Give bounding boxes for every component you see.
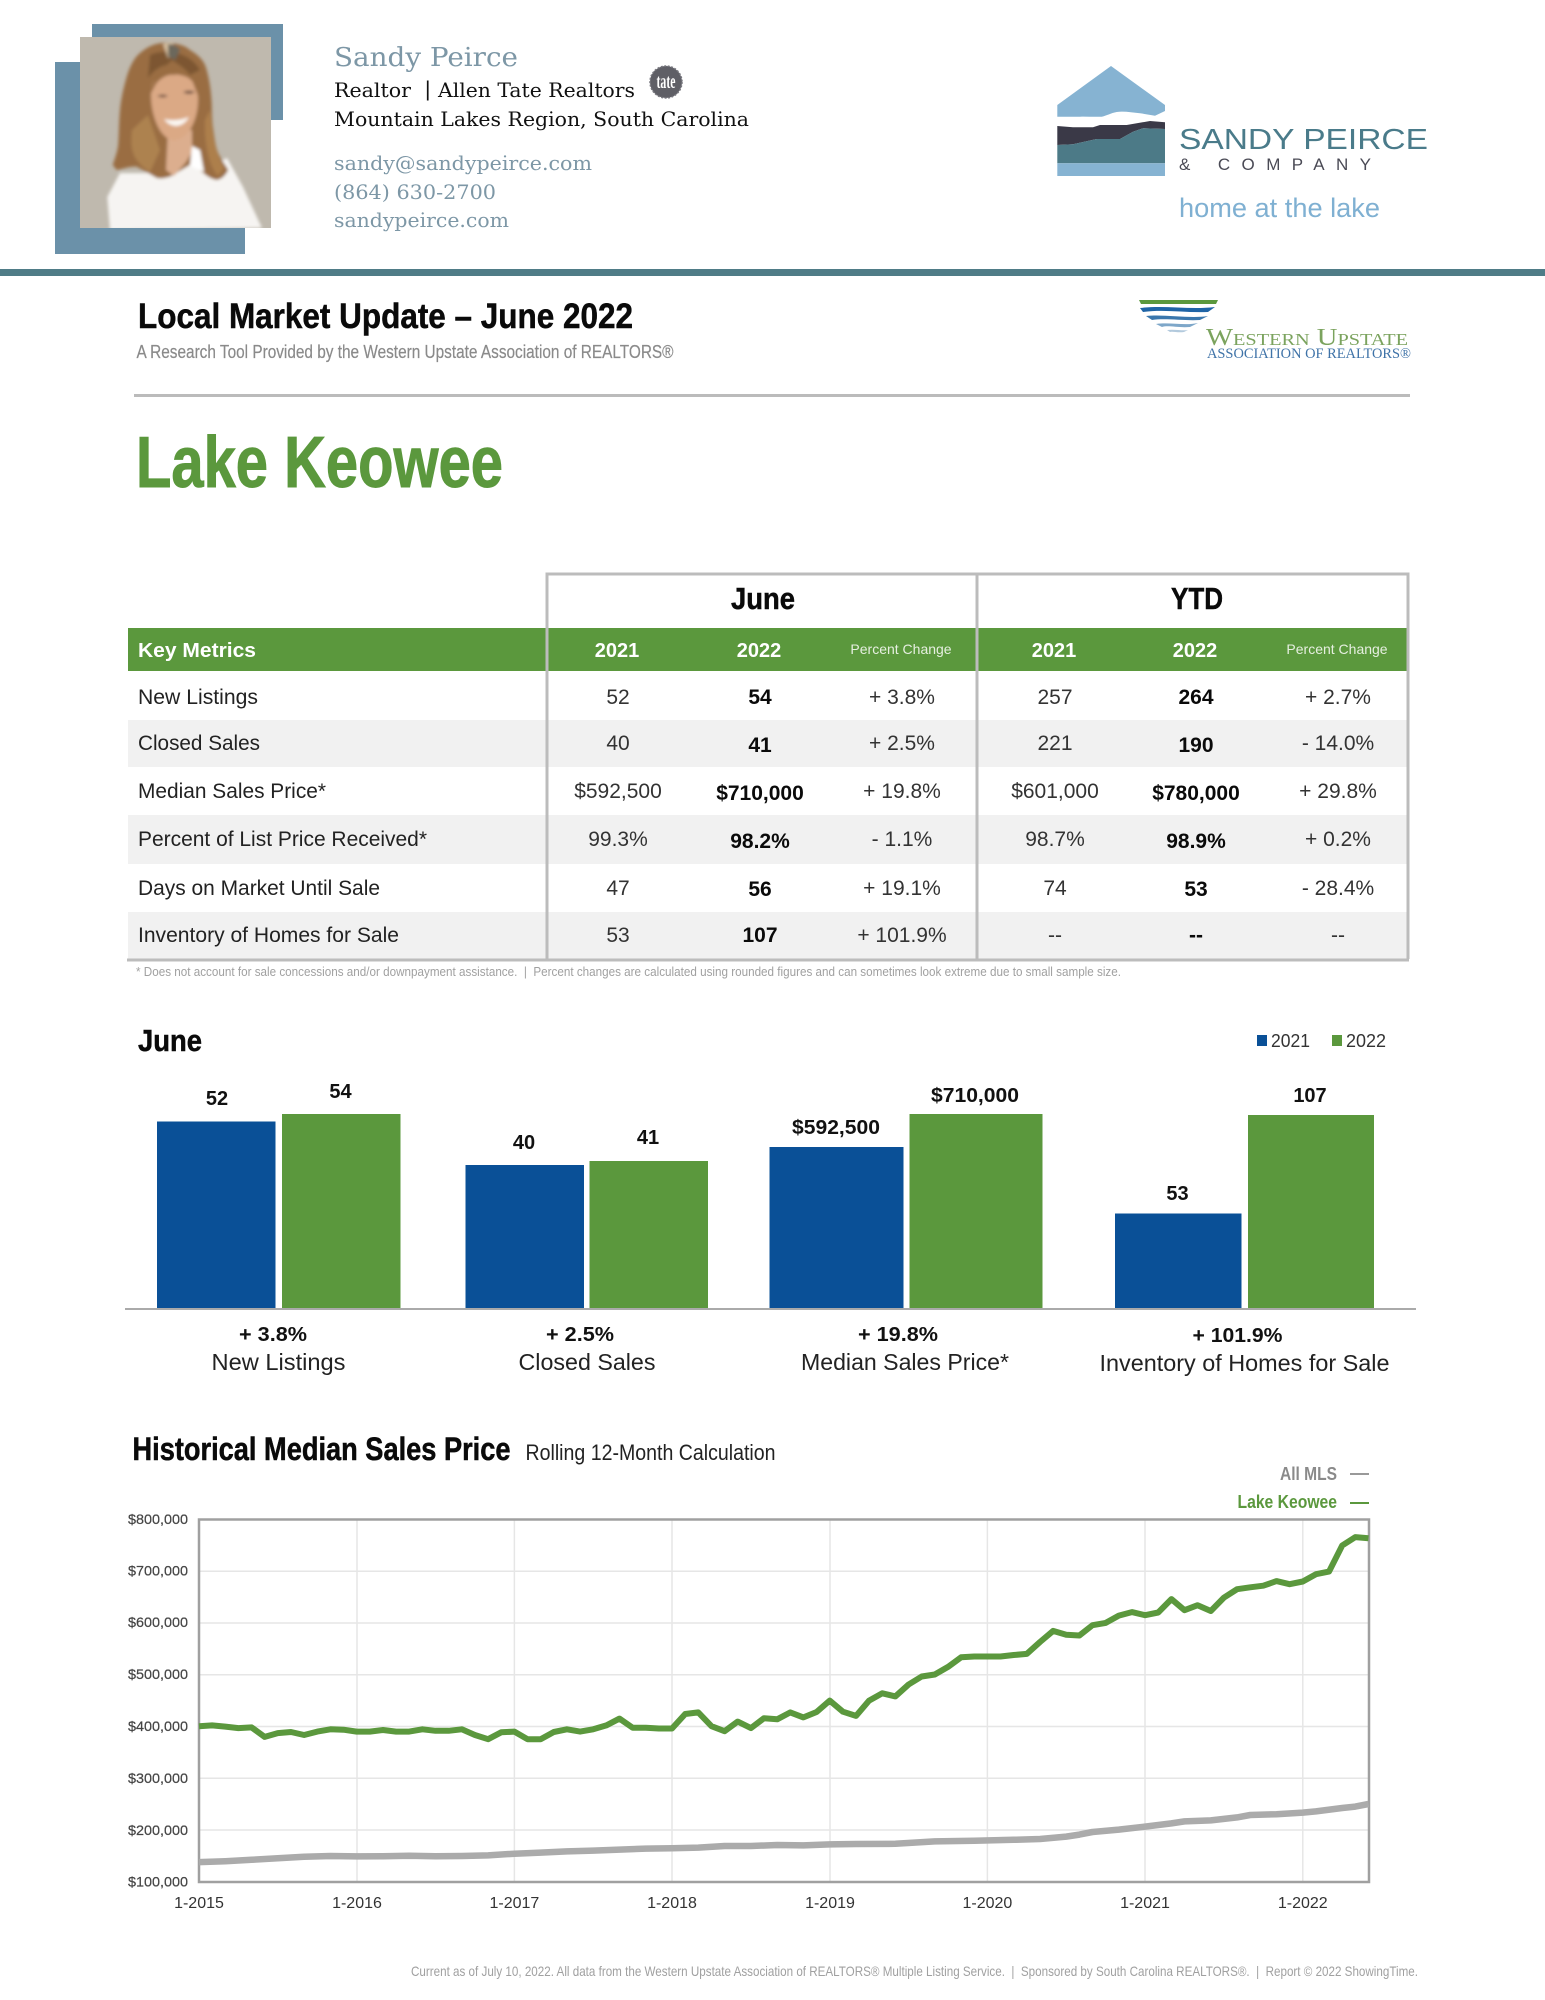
x axis labels: 1-2016 [332, 1895, 382, 1912]
table footnote: * Does not account for sale concessions and/or downpayment assistance. | Percent changes are calculated using rounded figures and can sometimes look extreme due to small sample size. [136, 964, 1121, 979]
June 2021 column: 47 [606, 877, 630, 900]
row stripes [128, 720, 1407, 959]
YTD percent change column [1299, 686, 1377, 947]
June 2021 column [574, 686, 662, 947]
y axis labels: $500,000 [128, 1666, 188, 1682]
YTD 2021 column: 98.7% [1025, 828, 1085, 851]
June 2022 column: 107 [742, 924, 778, 947]
bars: Median Sales Price: $592,500 [792, 1117, 880, 1139]
y axis labels: $600,000 [128, 1614, 188, 1630]
line chart legend: Lake Keowee [1238, 1492, 1337, 1512]
metric labels [138, 686, 427, 947]
June 2022 column: 54 [748, 686, 772, 709]
bars: Closed Sales: + 2.5% [546, 1324, 614, 1346]
bars: Inventory of Homes for Sale [1100, 1085, 1390, 1376]
logo: Western Upstate Association of Realtors [1139, 300, 1411, 362]
bars: Closed Sales: Closed Sales [518, 1349, 656, 1375]
x axis labels: 1-2022 [1278, 1895, 1328, 1912]
bars: Inventory of Homes for Sale: 53 [1166, 1183, 1189, 1205]
line chart subheading: Rolling 12-Month Calculation [526, 1440, 776, 1465]
icon: Allen Tate badge: tate [656, 71, 676, 93]
x axis labels: 1-2018 [647, 1895, 697, 1912]
bars: New Listings: + 3.8% [239, 1324, 307, 1346]
YTD 2022 column: $780,000 [1152, 782, 1240, 805]
YTD percent change column: + 2.7% [1305, 686, 1371, 709]
bars: Median Sales Price: Median Sales Price* [801, 1349, 1009, 1375]
column headers: 2022 [1173, 640, 1217, 662]
June percent change column [857, 686, 947, 947]
metric labels: New Listings [138, 686, 258, 709]
June 2022 column: 56 [748, 878, 772, 901]
YTD 2021 column: $601,000 [1011, 780, 1099, 803]
association name: Western Upstate [1206, 325, 1408, 351]
period heading: YTD: YTD [1171, 581, 1223, 616]
period heading: June: June [731, 581, 795, 616]
bars: Inventory of Homes for Sale: Inventory of Homes for Sale [1100, 1350, 1390, 1376]
June 2022 column: 41 [748, 734, 772, 757]
table header bar [128, 628, 1407, 671]
YTD percent change column: + 29.8% [1299, 780, 1377, 803]
logo tagline: home at the lake [1179, 193, 1380, 223]
YTD percent change column: -- [1331, 924, 1345, 947]
header: agent name: Sandy Peirce [334, 43, 518, 73]
y axis labels: $100,000 [128, 1874, 188, 1890]
panel: key metrics table [127, 574, 1409, 960]
y axis labels [128, 1511, 188, 1890]
y axis labels: $200,000 [128, 1822, 188, 1838]
June 2022 column: 98.2% [730, 830, 790, 853]
YTD 2022 column: 190 [1178, 734, 1214, 757]
YTD 2022 column: 98.9% [1166, 830, 1226, 853]
x axis labels: 1-2021 [1120, 1895, 1170, 1912]
y axis labels: $400,000 [128, 1718, 188, 1734]
YTD 2022 column: 264 [1178, 686, 1214, 709]
bars: New Listings [157, 1081, 400, 1375]
June 2021 column: $592,500 [574, 780, 662, 803]
column headers: 2021 [1032, 640, 1076, 662]
logo name: SANDY PEIRCE [1179, 124, 1428, 156]
bar chart legend: 2021 [1271, 1031, 1310, 1051]
June percent change column: + 19.8% [863, 780, 941, 803]
column headers: Percent Change [1286, 641, 1388, 657]
YTD 2021 column: -- [1048, 924, 1062, 947]
y axis labels: $700,000 [128, 1562, 188, 1578]
report title: Local Market Update – June 2022 [138, 297, 633, 336]
June 2021 column: 99.3% [588, 828, 648, 851]
x axis labels [174, 1895, 1328, 1912]
YTD 2022 column: -- [1189, 924, 1203, 947]
bars: Inventory of Homes for Sale: + 101.9% [1192, 1325, 1283, 1347]
logo: Sandy Peirce and Company [1057, 66, 1428, 223]
header: website: sandypeirce.com [334, 208, 509, 232]
YTD 2022 column: 53 [1184, 878, 1208, 901]
icon: Allen Tate badge [650, 66, 682, 98]
header: agent role: | [425, 78, 430, 101]
bars: New Listings: New Listings [212, 1349, 346, 1375]
association subtitle: ASSOCIATION OF REALTORS® [1207, 346, 1411, 362]
June percent change column: + 3.8% [869, 686, 935, 709]
column headers: 2021 [595, 640, 639, 662]
bars: Inventory of Homes for Sale: 107 [1293, 1085, 1327, 1107]
header: email: sandy@sandypeirce.com [334, 151, 592, 175]
header: agent portrait with blue frames [55, 24, 283, 254]
column headers: Percent Change [850, 641, 952, 657]
June 2021 column: 52 [606, 686, 630, 709]
bar chart legend [1257, 1031, 1386, 1051]
bars: New Listings: 54 [329, 1081, 352, 1103]
bar chart legend: 2022 [1346, 1031, 1386, 1051]
metric labels: Inventory of Homes for Sale [138, 924, 399, 947]
x axis labels: 1-2019 [805, 1895, 855, 1912]
line chart heading: Historical Median Sales Price [132, 1431, 510, 1467]
location heading: Lake Keowee [136, 423, 503, 503]
header: agent role [334, 78, 635, 102]
bar chart section heading: June [138, 1023, 202, 1058]
June percent change column: + 19.1% [863, 877, 941, 900]
YTD 2021 column: 221 [1037, 732, 1073, 755]
header: agent region: Mountain Lakes Region, South Carolina [334, 107, 749, 131]
June 2022 column: $710,000 [716, 782, 804, 805]
YTD 2022 column [1152, 686, 1240, 947]
bars: Median Sales Price: + 19.8% [858, 1324, 938, 1346]
YTD 2021 column: 74 [1043, 877, 1067, 900]
June percent change column: - 1.1% [872, 828, 932, 851]
wave mark [1139, 300, 1218, 332]
bars: Median Sales Price [770, 1085, 1042, 1375]
header: agent role: Allen Tate Realtors [437, 78, 635, 102]
June 2022 column [716, 686, 804, 947]
x axis labels: 1-2020 [962, 1895, 1012, 1912]
table frame [127, 574, 1409, 960]
series: All MLS [199, 1804, 1368, 1862]
line chart: historical median sales price [128, 1511, 1369, 1912]
bars: Closed Sales: 40 [513, 1132, 535, 1154]
y axis labels: $300,000 [128, 1770, 188, 1786]
series: Lake Keowee [199, 1537, 1368, 1739]
YTD 2021 column [1011, 686, 1099, 947]
metric labels: Percent of List Price Received* [138, 828, 427, 851]
bars: Closed Sales: 41 [637, 1127, 659, 1149]
bar chart [125, 1081, 1416, 1376]
column headers: 2022 [737, 640, 781, 662]
metric labels: Median Sales Price* [138, 780, 326, 803]
column headers: Key Metrics [138, 640, 256, 662]
metric labels: Closed Sales [138, 732, 260, 755]
June percent change column: + 101.9% [857, 924, 947, 947]
x axis labels: 1-2015 [174, 1895, 224, 1912]
June percent change column: + 2.5% [869, 732, 935, 755]
bars: Closed Sales [466, 1127, 708, 1375]
logo house mark [1057, 66, 1165, 176]
YTD 2021 column: 257 [1037, 686, 1073, 709]
bars: New Listings: 52 [206, 1088, 228, 1110]
report subtitle: A Research Tool Provided by the Western Upstate Association of REALTORS® [136, 342, 674, 362]
line chart legend: All MLS [1280, 1464, 1337, 1484]
YTD percent change column: + 0.2% [1305, 828, 1371, 851]
June 2021 column: 40 [606, 732, 630, 755]
y axis labels: $800,000 [128, 1511, 188, 1527]
June 2021 column: 53 [606, 924, 630, 947]
YTD percent change column: - 28.4% [1302, 877, 1374, 900]
header: agent role: Realtor [334, 78, 411, 102]
logo company: & COMPANY [1179, 155, 1371, 174]
teal header divider [0, 269, 1545, 276]
metric labels: Days on Market Until Sale [138, 877, 380, 900]
bars: Median Sales Price: $710,000 [931, 1085, 1019, 1107]
x axis labels: 1-2017 [489, 1895, 539, 1912]
YTD percent change column: - 14.0% [1302, 732, 1374, 755]
line chart legend [1238, 1464, 1369, 1512]
header: phone: (864) 630-2700 [334, 180, 496, 204]
column headers [138, 640, 1388, 662]
